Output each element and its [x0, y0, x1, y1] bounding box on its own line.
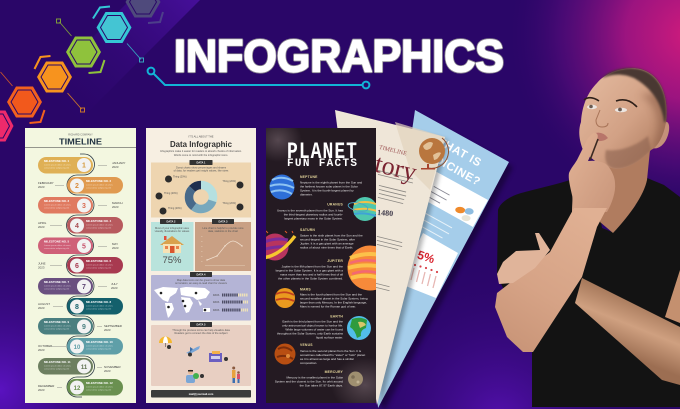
milestone 2 [38, 177, 123, 194]
neptune: diameter. [300, 192, 313, 196]
mars: Mars is named for the Roman god of war. [300, 304, 356, 308]
leaflet pictogram [411, 264, 438, 288]
milestone 4: 4 [75, 223, 79, 230]
leaflet ovals [454, 206, 474, 222]
milestone 4 [38, 217, 123, 234]
data section 3: line chart [195, 219, 251, 271]
milestone 5: 2023 [112, 246, 119, 250]
milestone 3: Lorem ipsum dolor sit amet, [44, 204, 71, 206]
data section 4: world map [151, 272, 251, 320]
uranus: URANUS [327, 202, 344, 206]
data heading: Infographics make it easier for readers to absorb chunks of information. [160, 149, 242, 153]
data section 2: house [151, 219, 194, 271]
icon: umbrella [159, 337, 172, 347]
milestone 6: 6 [75, 263, 79, 270]
milestone 2: consectetur adipiscing elit [86, 186, 111, 190]
donut chart [189, 185, 213, 209]
milestone 2: FEBRUARY [38, 181, 54, 185]
decorative hexagon chain [0, 0, 163, 142]
milestone 1: 2023 [112, 165, 119, 169]
milestone 6: JUNE [38, 262, 46, 266]
earth: throughout the Solar System, only Earth sustains [277, 332, 343, 336]
earth: only astronomical object known to harbor life. [282, 324, 343, 328]
leaflet heading: History [337, 140, 420, 187]
leaflet blue block text [420, 213, 452, 238]
data footer [151, 390, 251, 398]
milestone 11: consectetur adipiscing elit [44, 368, 69, 370]
milestone 12: 2023 [38, 388, 45, 392]
data section 1: donut [151, 160, 251, 218]
icon: doctor [186, 370, 199, 383]
panel: data infographic [146, 128, 256, 403]
shirt [497, 178, 680, 407]
jupiter: mass more than two and a half times that of all [280, 272, 343, 276]
milestone 12: consectetur adipiscing elit [86, 388, 111, 392]
milestone 10: OCTOBER [38, 344, 52, 348]
neptune: the farthest known solar planet in the Solar [300, 184, 358, 188]
milestone 2: 2023 [38, 185, 45, 189]
jupiter [276, 246, 376, 290]
saturn: Saturn is the sixth planet from the Sun and the [300, 234, 363, 238]
jupiter: JUPITER [327, 259, 343, 263]
milestone 1: consectetur adipiscing elit [44, 166, 69, 170]
data section 1: donut: Donut charts show percentages and shares [176, 166, 227, 170]
milestone 11: Lorem ipsum dolor sit amet, [44, 364, 71, 368]
earth: Earth is the third planet from the Sun and the [282, 320, 343, 324]
data section 5: process: DATA 5 [197, 322, 206, 326]
mercury: MERCURY [325, 370, 344, 374]
milestone 9: MILESTONE NO. 9 [44, 320, 70, 324]
earth [277, 314, 371, 340]
neptune: System. It is the fourth-largest planet by [300, 188, 354, 192]
data section 4: world map: on location, an easy-to-read chart for viewers [175, 281, 228, 285]
mercury [275, 370, 363, 388]
milestone 6: Lorem ipsum dolor sit amet, [86, 264, 113, 266]
mercury: the Sun takes 87.97 Earth days. [300, 384, 343, 388]
milestone 12: 12 [74, 386, 81, 392]
milestone 8: 2023 [38, 306, 45, 310]
milestone 3: MARCH [112, 201, 123, 205]
man thinking [495, 68, 680, 407]
icon: box [209, 351, 222, 362]
data heading: Words come to mind with the infographic icons. [174, 153, 228, 157]
data section 3: line chart: Line chart is helpful to provide more [202, 226, 244, 230]
milestone 8: 8 [75, 304, 79, 311]
milestone 2: 2 [75, 183, 79, 190]
mars: larger than only Mercury. In the English language, [300, 300, 367, 304]
neptune: Neptune is the eighth planet from the Sun and [300, 180, 362, 184]
milestone 12: DECEMBER [38, 384, 54, 388]
milestone 12: Lorem ipsum dolor sit amet, [86, 386, 113, 388]
milestone 1: MILESTONE NO. 1 [44, 159, 70, 163]
data section 1: donut: Thing (20%) [222, 202, 236, 205]
milestone 11: MILESTONE NO. 11 [44, 360, 71, 364]
milestone 6: MILESTONE NO. 6 [86, 259, 112, 263]
earth: EARTH [330, 314, 343, 318]
upper arm [665, 270, 680, 323]
milestone 6: 2023 [38, 266, 45, 270]
mars: second-smallest planet in the Solar System, being [300, 296, 368, 300]
tucked fingers [497, 233, 550, 284]
face features [584, 98, 637, 141]
neptune: NEPTUNE [300, 175, 318, 179]
data section 2: house: visually, illustrations for values [155, 229, 190, 233]
saturn: Jupiter. It is a gas giant with an average [300, 242, 354, 246]
milestone 5 [38, 238, 119, 254]
data section 4: world map: DATA 4 [197, 272, 206, 276]
people rows: DATA [213, 301, 220, 304]
uranus: Uranus is the seventh planet from the Sun. It has [277, 208, 343, 212]
milestone 11: 2023 [104, 369, 111, 373]
hexagon: pink [0, 110, 14, 142]
paper: medicine leaflet [376, 110, 513, 409]
milestone 6 [38, 257, 123, 274]
milestone 3: consectetur adipiscing elit [44, 206, 69, 210]
milestone 10: 2023 [38, 348, 45, 352]
milestone 9: consectetur adipiscing elit [44, 328, 69, 330]
milestone 9: Lorem ipsum dolor sit amet, [44, 324, 71, 328]
milestone 10 [38, 338, 123, 354]
milestone 7 [38, 278, 118, 294]
data section 3: line chart: data, statistics in the chart [208, 229, 238, 233]
milestone 5: Lorem ipsum dolor sit amet, [44, 244, 71, 247]
jupiter: the other planets in the Solar System combined. [278, 276, 343, 280]
leaflet text [428, 186, 450, 204]
milestone 8: MILESTONE NO. 8 [86, 300, 112, 304]
data section 4: world map: Map data icons can be great to show data [177, 278, 226, 282]
milestone 10: Lorem ipsum dolor sit amet, [86, 344, 113, 348]
head shading [605, 90, 672, 169]
people rows: DATA [213, 294, 220, 297]
data section 2: house: DATA 2 [167, 220, 176, 224]
earth: liquid surface water. [316, 336, 343, 340]
leaflet text [376, 170, 413, 291]
panel: timeline [25, 128, 136, 403]
milestone 7: 7 [82, 284, 86, 291]
milestone 12 [38, 379, 123, 396]
milestone 4: APRIL [38, 221, 47, 225]
venus: composition. [300, 361, 317, 365]
raised forearm [495, 208, 607, 352]
mercury: System and the closest to the Sun. Its orbit around [275, 380, 343, 384]
lower forearm [575, 278, 680, 385]
neck [600, 150, 650, 233]
uranus [277, 197, 377, 221]
milestone 11: 11 [81, 365, 88, 371]
data section 5: process [151, 322, 251, 386]
milestone 2: Lorem ipsum dolor sit amet, [86, 184, 113, 186]
saturn: second-largest in the Solar System, after [300, 238, 355, 242]
leaflet heading: TIMELINE [378, 145, 408, 158]
donut labels [156, 176, 244, 214]
milestone 8 [38, 298, 123, 314]
milestone 4: MILESTONE NO. 4 [86, 219, 112, 223]
people rows [213, 294, 248, 312]
milestone 7: JULY [111, 282, 118, 286]
milestone 4: Lorem ipsum dolor sit amet, [86, 224, 113, 226]
leaflet headline: MEDICINE? [416, 145, 482, 189]
uranus: largest planetary mass in the Solar System. [284, 216, 343, 220]
data section 5: process: Through the process icons can help visualize data [172, 328, 230, 332]
milestone 12: MILESTONE NO. 12 [86, 381, 113, 385]
data section 5: process: Readers get to connect the dots of the subject [175, 331, 228, 335]
leaflet date: 1480 [377, 208, 393, 218]
data section 1: donut: Thing (20%) [168, 207, 182, 210]
milestone 8: AUGUST [38, 302, 50, 306]
stubble [602, 68, 667, 122]
milestone 4: 2023 [38, 225, 45, 229]
hexagon: cyan [93, 6, 144, 62]
data heading: IT'S ALL ABOUT THE [189, 134, 214, 138]
data section 1: donut: of data, for readers get insight values, like sizes [174, 168, 229, 172]
milestone 3: MILESTONE NO. 3 [44, 199, 70, 203]
head [579, 68, 667, 169]
timeline heading: RICHARD COMPANY [68, 134, 93, 136]
title underline connector [148, 68, 369, 88]
milestone 5: consectetur adipiscing elit [44, 247, 69, 250]
mercury: Mercury is the smallest planet in the Solar [286, 376, 343, 380]
milestone 7: Lorem ipsum dolor sit amet, [44, 284, 71, 288]
hexagon: red orange [0, 72, 44, 123]
ear [652, 122, 669, 148]
title: INFOGRAPHICS [174, 30, 504, 82]
mars [275, 288, 368, 308]
milestone 7: consectetur adipiscing elit [44, 288, 69, 290]
planet title: FUN FACTS [287, 158, 357, 170]
milestone 3: 2023 [112, 205, 119, 209]
saturn [262, 228, 363, 260]
milestone 1: Lorem ipsum dolor sit amet, [44, 164, 71, 166]
saturn: radius of about nine times that of Earth. [300, 246, 353, 250]
milestone 9 [38, 318, 122, 334]
hexagon: green [56, 19, 104, 73]
neptune [270, 174, 362, 200]
data section 1: donut: DATA 1 [197, 160, 206, 164]
milestone 9: 9 [82, 324, 86, 331]
data section 2: house: 75% [162, 255, 182, 266]
milestone 4: consectetur adipiscing elit [86, 226, 111, 230]
icon: people [232, 366, 240, 383]
mars: Mars is the fourth planet from the Sun and the [300, 292, 362, 296]
venus: VENUS [300, 343, 313, 347]
milestone 8: Lorem ipsum dolor sit amet, [86, 304, 113, 308]
venus: sometimes called Earth's "sister" or "twin" planet [300, 353, 365, 357]
timeline s-curve [66, 154, 94, 397]
milestone 3: 3 [82, 203, 86, 210]
jupiter: largest in the Solar System. It is a gas giant with a [276, 268, 343, 272]
earth: While large volumes of water can be found [285, 328, 343, 332]
data section 1: donut: Thing (20%) [222, 180, 236, 183]
finger shadow [590, 139, 598, 160]
milestone 5: 5 [82, 244, 86, 250]
icon: house [160, 236, 184, 253]
icon: plane [186, 346, 200, 354]
icon: globe [419, 138, 448, 170]
data footer: mail@yourmail.com [189, 392, 214, 396]
venus [274, 343, 365, 365]
jupiter: Jupiter is the fifth planet from the Sun and the [282, 264, 343, 268]
data heading: Data Infographic [170, 140, 232, 149]
leaflet statistic: 5% [416, 248, 437, 266]
data section 1: donut: Thing (20%) [173, 176, 187, 178]
hexagon: orange [34, 56, 84, 112]
timeline heading [25, 134, 136, 148]
milestone 1 [38, 157, 126, 174]
hexagon: grey [126, 0, 163, 23]
planet title: PLANET [287, 140, 357, 166]
data section 2: house: Most of your infographic uses [155, 226, 190, 230]
venus: Venus is the second planet from the Sun. It is [300, 349, 362, 353]
title: INFOGRAPHICS [174, 30, 504, 82]
panel: planet fun facts [266, 128, 376, 403]
data heading [160, 134, 242, 157]
milestone 11 [38, 358, 121, 374]
milestone 7: 2023 [111, 286, 118, 290]
milestone 7: MILESTONE NO. 7 [44, 280, 70, 284]
milestone 10: MILESTONE NO. 10 [86, 340, 113, 344]
saturn: SATURN [300, 228, 315, 232]
milestone 3 [38, 197, 123, 214]
milestone 1: JANUARY [112, 161, 126, 165]
milestone 10: 10 [74, 345, 81, 351]
milestone 1: 1 [82, 162, 86, 170]
milestone 11: NOVEMBER [104, 365, 121, 369]
people rows: DATA [213, 309, 220, 312]
milestone 9: SEPTEMBER [104, 324, 122, 328]
mars: MARS [300, 288, 311, 292]
milestone 8: consectetur adipiscing elit [86, 308, 111, 310]
venus: as it is almost as large and has a similar [300, 357, 354, 361]
milestone 5: MAY [112, 242, 118, 246]
leaflet headline: WHAT IS [432, 134, 483, 170]
paper: history leaflet [335, 110, 448, 408]
uranus: the third-largest planetary radius and fourth- [284, 212, 343, 216]
hand [569, 133, 615, 212]
milestone 2: MILESTONE NO. 2 [86, 179, 112, 183]
timeline heading: TIMELINE [59, 138, 103, 146]
world map [154, 287, 210, 318]
data section 1: donut: Thing (20%) [164, 192, 178, 195]
milestone 9: 2023 [104, 328, 111, 332]
milestone 10: consectetur adipiscing elit [86, 348, 111, 350]
data section 3: line chart: DATA 3 [219, 220, 228, 224]
milestone 5: MILESTONE NO. 5 [44, 240, 70, 244]
milestone 6: consectetur adipiscing elit [86, 266, 111, 270]
